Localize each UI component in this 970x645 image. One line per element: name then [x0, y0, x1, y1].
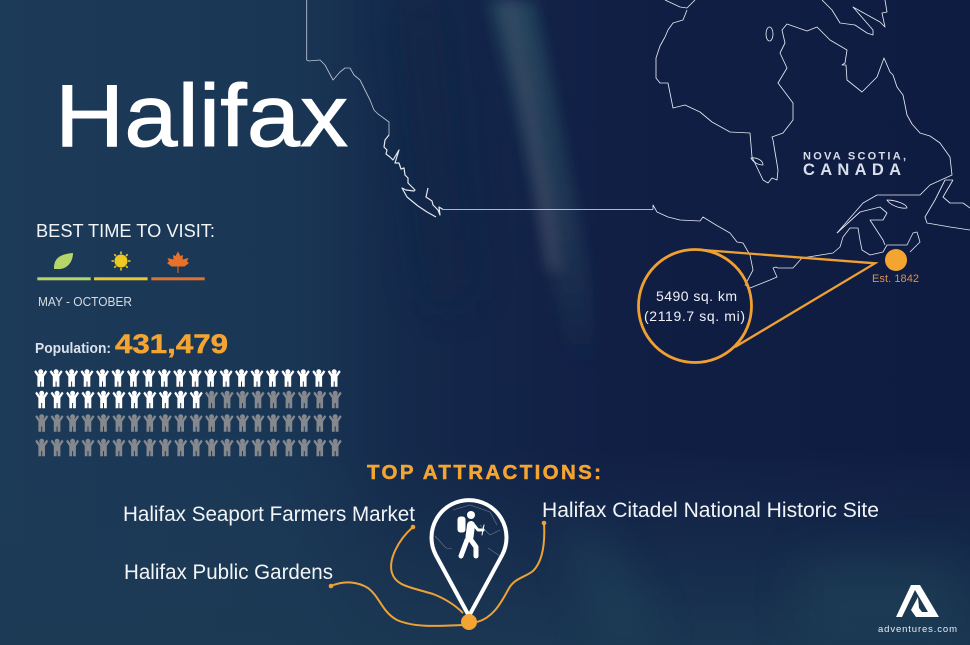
- icon: location pin with hiker: [432, 500, 506, 630]
- anticosti island: [887, 200, 907, 208]
- bar: spring: [37, 277, 91, 280]
- logo: adventures.com: adventures.com: [878, 624, 957, 635]
- hudson bay coast: [656, 10, 952, 233]
- logo: adventures.com: [878, 585, 957, 635]
- icon: maple leaf: [167, 252, 189, 273]
- pin map lines: [435, 505, 500, 556]
- established year: Est. 1842: [872, 273, 919, 285]
- icon: sun: [112, 252, 130, 270]
- attraction label: gardens: Halifax Public Gardens: [124, 561, 333, 584]
- population label: Population:: [35, 340, 111, 357]
- label: location: [803, 150, 906, 179]
- pin outline: [432, 500, 506, 616]
- label: location: NOVA SCOTIA,: [803, 150, 906, 162]
- best time to visit section: [36, 221, 215, 309]
- icon: spring leaf: [54, 253, 73, 269]
- bar: autumn: [151, 277, 205, 280]
- connector end dots: [329, 521, 546, 588]
- attraction label: market: Halifax Seaport Farmers Market: [123, 503, 415, 526]
- area text: 5490 sq. km: [656, 288, 737, 304]
- population number: 431,479: [115, 329, 228, 359]
- heading: best time to visit: BEST TIME TO VISIT:: [36, 221, 215, 241]
- callout: area circle: (2119.7 sq. mi): [644, 308, 745, 324]
- label: location: CANADA: [803, 161, 901, 179]
- pictogram: population people: [34, 369, 342, 456]
- hiker: [458, 511, 484, 556]
- title: Halifax: [55, 66, 348, 165]
- lake island: [751, 158, 763, 165]
- great lakes border: [653, 205, 920, 288]
- population: [35, 329, 228, 359]
- connector lines: [331, 523, 544, 626]
- 49th parallel: [443, 208, 653, 210]
- marker: Halifax: [885, 249, 907, 271]
- bar: summer: [94, 277, 148, 280]
- mainland coast at border: [426, 188, 443, 215]
- heading: top attractions: TOP ATTRACTIONS:: [367, 461, 601, 484]
- akimiski island: [766, 27, 773, 41]
- west coast outline: [307, 0, 389, 135]
- attraction label: citadel: Halifax Citadel National Historic Site: [542, 499, 879, 522]
- newfoundland: [925, 180, 970, 230]
- map of Canada: [307, 0, 970, 288]
- arctic islands: [665, 0, 887, 35]
- jagged coast and vancouver island: [384, 135, 436, 217]
- months text: MAY - OCTOBER: [38, 295, 132, 309]
- callout: area circle: [638, 250, 875, 362]
- pin base dot: [461, 614, 477, 630]
- zoom lines: [703, 250, 875, 347]
- st lawrence: [837, 207, 887, 245]
